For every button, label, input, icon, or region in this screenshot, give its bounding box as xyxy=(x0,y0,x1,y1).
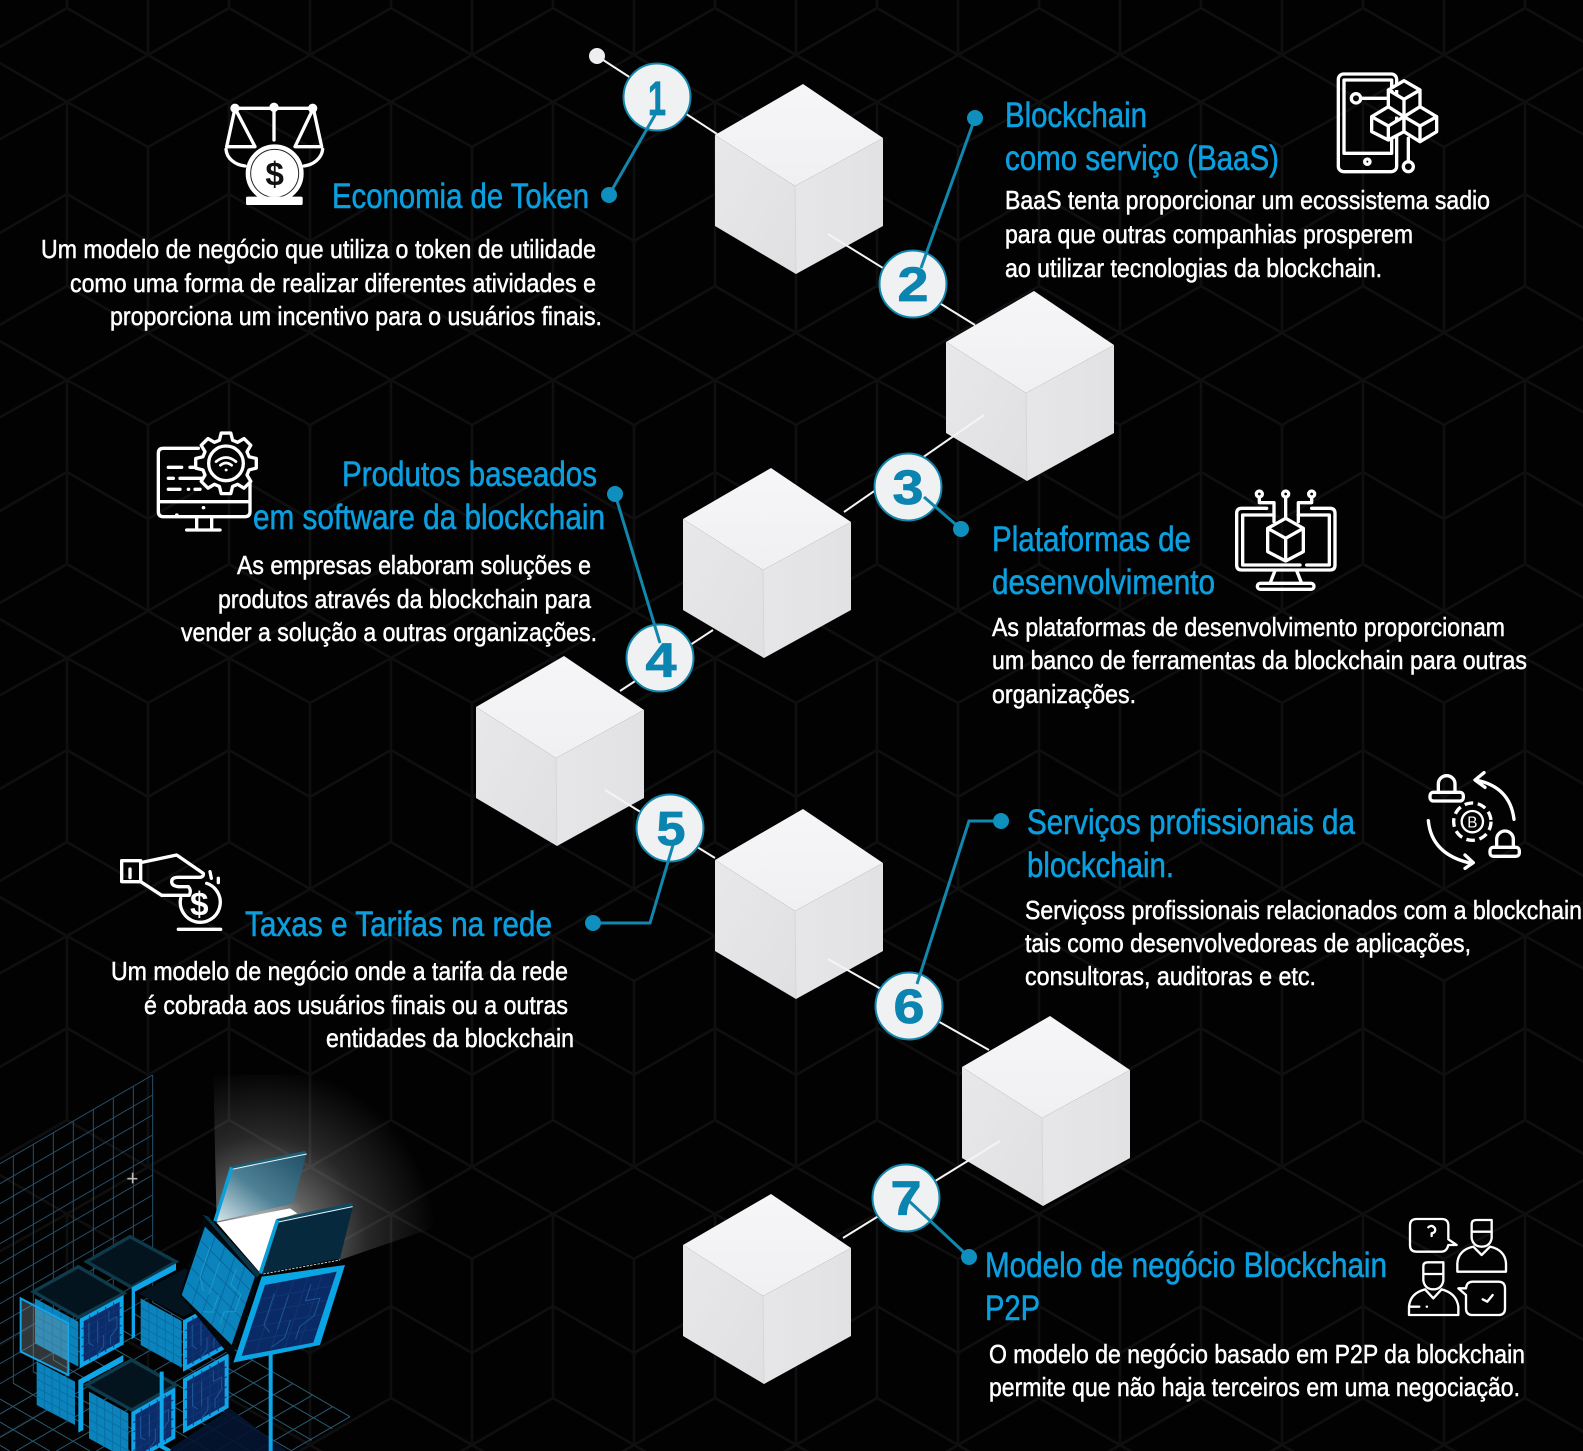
icon: hand with coin xyxy=(122,855,221,929)
description: BaaS tenta proporcionar um ecossistema sadio xyxy=(1005,185,1490,215)
translucent square xyxy=(21,1298,68,1375)
floor grid xyxy=(0,1302,350,1451)
heading: em software da blockchain xyxy=(253,498,605,537)
number badge 4 xyxy=(626,624,694,692)
floor shadow xyxy=(167,1408,287,1451)
description: permite que não haja terceiros em uma negociação. xyxy=(989,1372,1520,1402)
heading: Taxas e Tarifas na rede xyxy=(245,905,552,944)
description: tais como desenvolvedoreas de aplicações, xyxy=(1025,928,1471,958)
description: Um modelo de negócio onde a tarifa da rede xyxy=(111,956,568,986)
number badge 1 xyxy=(624,64,690,130)
description: como uma forma de realizar diferentes atividades e xyxy=(70,268,596,298)
panel: Produtos baseados em software xyxy=(158,433,605,647)
panel: Serviços profissionais xyxy=(1025,773,1582,991)
description xyxy=(111,956,574,1053)
heading: como serviço (BaaS) xyxy=(1005,139,1279,178)
description xyxy=(1005,185,1490,283)
heading: desenvolvimento xyxy=(992,563,1215,602)
description: produtos através da blockchain para xyxy=(218,584,591,614)
heading: Produtos baseados xyxy=(342,455,597,494)
icon: monitor with cube xyxy=(1237,491,1335,589)
number badge 5 xyxy=(636,794,704,862)
description: consultoras, auditoras e etc. xyxy=(1025,961,1316,991)
description xyxy=(1025,895,1582,991)
number badge 7 xyxy=(872,1164,940,1232)
description xyxy=(989,1339,1525,1402)
number badge 4: 4 xyxy=(646,635,677,688)
panel: Plataformas de desenvolvimento xyxy=(992,491,1527,709)
icon: exchange between people xyxy=(1428,773,1519,868)
description: As empresas elaboram soluções e xyxy=(237,550,591,580)
icon: exchange between people: B xyxy=(1467,814,1477,831)
description: vender a solução a outras organizações. xyxy=(181,617,597,647)
heading: P2P xyxy=(985,1289,1040,1328)
light beam xyxy=(213,1075,500,1260)
heading xyxy=(253,455,605,537)
number badge 1: 1 xyxy=(648,73,666,126)
plus mark xyxy=(127,1173,137,1183)
description: proporciona um incentivo para o usuários finais. xyxy=(110,301,602,331)
description: entidades da blockchain xyxy=(326,1023,574,1053)
icon: two people talking xyxy=(1409,1219,1506,1315)
description: organizações. xyxy=(992,679,1136,709)
lower left cube xyxy=(37,1355,123,1433)
open lid back xyxy=(213,1151,307,1222)
description: é cobrada aos usuários finais ou a outras xyxy=(144,990,568,1020)
back cube xyxy=(87,1237,176,1339)
icon: hand with coin: $ xyxy=(190,886,209,923)
description xyxy=(181,550,597,647)
heading: Plataformas de xyxy=(992,520,1191,559)
middle cube xyxy=(138,1268,225,1368)
heading: Blockchain xyxy=(1005,96,1147,135)
icon: phone with cubes xyxy=(1338,74,1437,172)
wall grid xyxy=(0,1075,153,1384)
icon: monitor with gear xyxy=(158,433,256,530)
number badge 5: 5 xyxy=(656,803,686,856)
front cube xyxy=(87,1360,176,1451)
start dot xyxy=(589,48,605,64)
description: um banco de ferramentas da blockchain para outras xyxy=(992,645,1527,675)
glowing inside xyxy=(217,1208,297,1273)
stem xyxy=(265,1353,277,1451)
heading: Economia de Token xyxy=(332,177,589,216)
heading: Modelo de negócio Blockchain xyxy=(985,1246,1387,1285)
lower right cube xyxy=(185,1357,227,1430)
heading xyxy=(1027,803,1355,885)
illustration: glowing open blockchain cubes xyxy=(0,1075,500,1451)
number badge 2 xyxy=(880,250,946,318)
heading: Serviços profissionais da xyxy=(1027,803,1355,842)
icon: scales with coin xyxy=(226,104,323,205)
description: O modelo de negócio basado em P2P da blockchain xyxy=(989,1339,1525,1369)
description: ao utilizar tecnologias da blockchain. xyxy=(1005,253,1382,283)
description: As plataformas de desenvolvimento proporcionam xyxy=(992,612,1505,642)
panel: Taxas e Tarifas na rede xyxy=(111,855,574,1053)
panel: Blockchain como serviço xyxy=(1005,74,1490,283)
heading xyxy=(1005,96,1279,178)
big cube left face xyxy=(180,1215,261,1358)
panel: Economia de Token xyxy=(41,104,602,331)
heading: blockchain. xyxy=(1027,846,1174,885)
callout lines xyxy=(585,110,1009,1265)
heading xyxy=(992,520,1215,602)
icon: scales with coin: $ xyxy=(265,156,284,193)
white connector lines xyxy=(597,56,1000,1238)
description xyxy=(992,612,1527,709)
number badge 3: 3 xyxy=(892,462,924,515)
number badge 7: 7 xyxy=(890,1173,922,1226)
number badge 6: 6 xyxy=(894,981,924,1034)
open lid front xyxy=(259,1203,353,1274)
number badge 2: 2 xyxy=(898,259,928,312)
cubes chain xyxy=(476,84,1130,1384)
description: Um modelo de negócio que utiliza o token de utilidade xyxy=(41,234,596,264)
big cube right face xyxy=(233,1265,345,1363)
number badge 3 xyxy=(874,454,942,520)
number badge 6 xyxy=(876,972,942,1040)
description xyxy=(41,234,602,331)
panel: Modelo de negócio P2P xyxy=(985,1219,1525,1402)
description: para que outras companhias prosperem xyxy=(1005,219,1413,249)
heading xyxy=(985,1246,1387,1328)
upper left cube xyxy=(33,1267,124,1367)
